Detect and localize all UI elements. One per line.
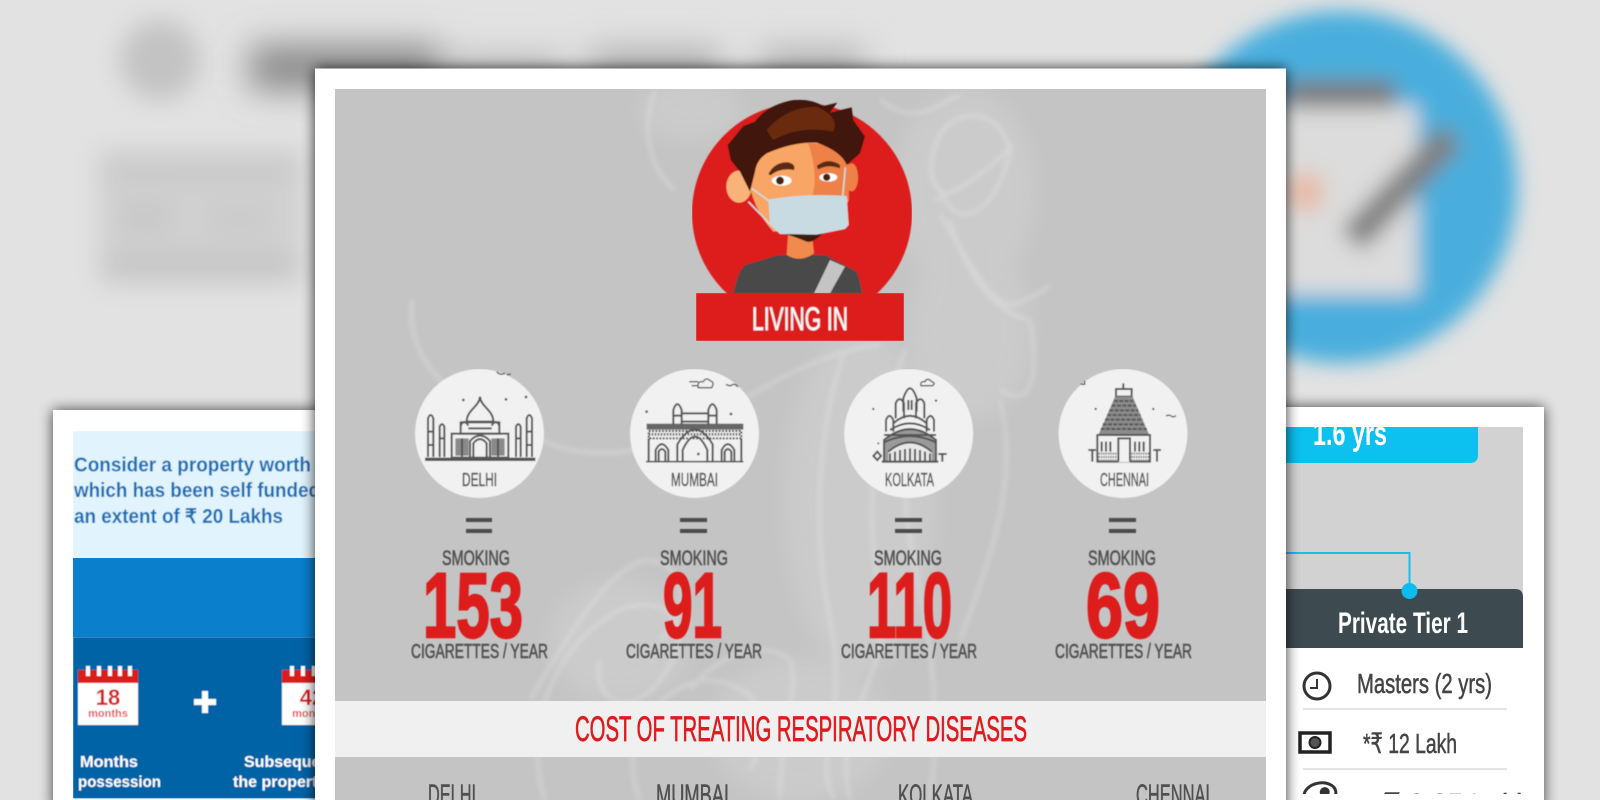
connector line bbox=[1270, 553, 1410, 590]
shoulder strap bbox=[814, 260, 845, 293]
blurred background blue circle icon bbox=[1165, 11, 1517, 363]
number: 91 bbox=[663, 555, 722, 657]
red circle bbox=[692, 103, 912, 323]
blurred background logo circle bbox=[120, 20, 200, 100]
beard bbox=[780, 233, 823, 242]
city label: KOLKATA bbox=[885, 470, 934, 490]
calendar icon: 18 months bbox=[78, 666, 138, 725]
eyebrows bbox=[768, 162, 794, 175]
calendar icon: 18 months: months bbox=[88, 708, 128, 720]
number: 153 bbox=[423, 555, 523, 657]
blurred background heading bbox=[250, 45, 865, 90]
equals sign bbox=[895, 520, 922, 531]
neck bbox=[787, 232, 814, 259]
left card intro panel: an extent of ₹ 20 Lakhs bbox=[74, 506, 283, 528]
smoking label: SMOKING bbox=[874, 547, 942, 570]
main grey panel bbox=[335, 89, 1266, 800]
city label: MUMBAI bbox=[671, 470, 718, 490]
private tier header: Private Tier 1 bbox=[1338, 607, 1468, 640]
unit label: CIGARETTES / YEAR bbox=[411, 641, 548, 663]
left card dark blue panel: the property bbox=[233, 774, 326, 791]
living in banner: LIVING IN bbox=[752, 301, 848, 337]
city label: CHENNAI bbox=[1100, 470, 1149, 490]
city column: Delhi bbox=[411, 369, 548, 663]
left card intro panel: which has been self funded bbox=[73, 480, 320, 502]
eyes bbox=[772, 176, 792, 186]
city column: Kolkata bbox=[841, 369, 977, 663]
money icon bbox=[1300, 733, 1330, 752]
calendar icon: subsequent months: 42 bbox=[300, 685, 324, 710]
blurred background paragraph bbox=[98, 150, 303, 285]
calendar icon: subsequent months: months bbox=[292, 708, 332, 720]
city column: Chennai bbox=[1055, 369, 1192, 663]
icon: Mumbai Gateway of India circle bbox=[630, 369, 759, 498]
person illustration bbox=[692, 100, 912, 323]
icon: Kolkata temple circle bbox=[844, 369, 973, 498]
left card dark blue panel bbox=[73, 637, 342, 798]
hair bbox=[728, 100, 865, 192]
left card intro panel bbox=[73, 431, 333, 558]
left card intro panel: Consider a property worth bbox=[74, 454, 311, 476]
duration box bbox=[1270, 407, 1544, 463]
left card dark blue panel: possession bbox=[78, 774, 161, 791]
city column: Mumbai bbox=[626, 369, 762, 663]
icon: Delhi Taj Mahal circle bbox=[415, 369, 544, 498]
smoking label: SMOKING bbox=[1088, 547, 1156, 570]
smoke background bbox=[548, 91, 1035, 798]
masters row text: Masters (2 yrs) bbox=[1357, 668, 1492, 699]
smoking label: SMOKING bbox=[442, 547, 510, 570]
calendar icon: 18 months: 18 bbox=[96, 685, 120, 710]
equals sign bbox=[466, 520, 492, 531]
right card textured panel bbox=[1270, 427, 1523, 597]
duration box: 1.6 yrs bbox=[1313, 415, 1387, 453]
face bbox=[751, 140, 849, 232]
unit label: CIGARETTES / YEAR bbox=[841, 641, 977, 663]
clock icon bbox=[1304, 673, 1330, 699]
icon: Chennai gopuram temple circle bbox=[1058, 369, 1188, 498]
left background card bbox=[53, 410, 353, 800]
equals sign bbox=[1109, 520, 1136, 531]
cost column headings bbox=[428, 779, 1210, 800]
private tier header bbox=[1270, 583, 1523, 648]
smoking label: SMOKING bbox=[660, 547, 728, 570]
calendar icon: subsequent months bbox=[282, 666, 342, 725]
cost of treating band bbox=[335, 701, 1266, 757]
plus sign bbox=[194, 691, 216, 713]
left card blue strip bbox=[73, 558, 333, 637]
main card bbox=[315, 68, 1286, 800]
main card shadow bbox=[315, 68, 1286, 800]
fee row text: *₹ 12 Lakh bbox=[1363, 728, 1457, 759]
living in banner bbox=[696, 293, 904, 341]
unit label: CIGARETTES / YEAR bbox=[626, 641, 762, 663]
face mask bbox=[768, 195, 849, 235]
cost of treating band: COST OF TREATING RESPIRATORY DISEASES bbox=[575, 710, 1027, 749]
eye icon bbox=[1302, 780, 1338, 800]
unit label: CIGARETTES / YEAR bbox=[1055, 641, 1192, 663]
months possession label: Months bbox=[80, 754, 138, 771]
number: 69 bbox=[1086, 555, 1160, 657]
ears bbox=[726, 171, 752, 203]
number: 110 bbox=[867, 555, 952, 657]
shirt bbox=[733, 255, 862, 293]
right background card bbox=[1270, 407, 1544, 800]
city label: DELHI bbox=[462, 470, 497, 490]
equals sign bbox=[680, 520, 707, 531]
subsequent label: Subsequent bbox=[244, 754, 336, 771]
